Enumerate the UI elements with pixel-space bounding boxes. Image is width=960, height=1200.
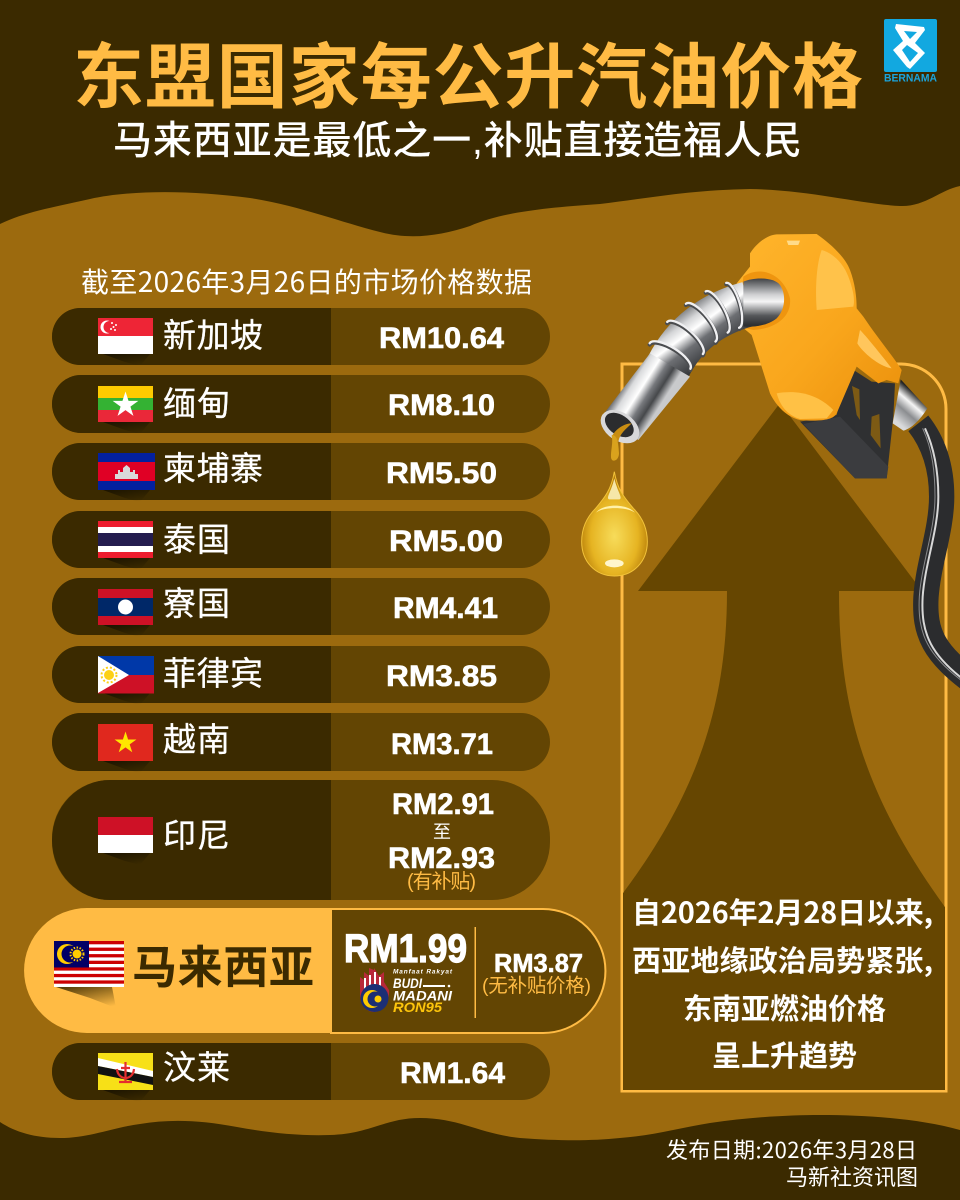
footer: publication date and credit: 发布日期:2026年3月28日 bbox=[666, 1133, 917, 1165]
price: Myanmar: RM8.10 bbox=[388, 389, 495, 422]
flag: Malaysia bbox=[54, 941, 124, 987]
price: Cambodia: RM5.50 bbox=[386, 457, 497, 490]
callout: regional tension text bbox=[632, 890, 933, 1075]
price: Brunei: RM1.64 bbox=[400, 1057, 505, 1090]
footer: publication date and credit bbox=[666, 1133, 918, 1192]
callout: regional tension text: 呈上升趋势 bbox=[712, 1033, 857, 1075]
row: Vietnam bbox=[52, 713, 550, 773]
icon: fuel nozzle with oil drop bbox=[582, 234, 960, 687]
panel: rising price outline box bbox=[622, 364, 946, 1091]
price: Singapore: RM10.64 bbox=[379, 322, 504, 355]
logo: Budi Madani RON95 bbox=[360, 968, 453, 1015]
row: Singapore bbox=[52, 308, 550, 366]
price range: Indonesia: RM2.91 bbox=[392, 788, 494, 821]
price: Malaysia unsubsidised bbox=[482, 948, 591, 997]
label: Myanmar: 缅甸 bbox=[163, 377, 230, 425]
row: Cambodia bbox=[52, 442, 550, 502]
label: Philippines: 菲律宾 bbox=[163, 647, 263, 695]
logo: Budi Madani RON95: Manfaat Rakyat bbox=[393, 968, 453, 976]
price: Thailand: RM5.00 bbox=[389, 525, 503, 558]
logo: Bernama bbox=[884, 19, 937, 84]
label: Thailand: 泰国 bbox=[163, 513, 230, 561]
logo: Budi Madani RON95: BUDI bbox=[393, 975, 423, 991]
price range: Indonesia: 至 bbox=[433, 818, 451, 844]
row: Thailand bbox=[52, 511, 550, 570]
bottom wave footer band bbox=[0, 1115, 960, 1200]
title: 东盟国家每公升汽油价格 bbox=[73, 21, 863, 123]
top wave header band bbox=[0, 0, 960, 236]
flag: Thailand bbox=[98, 521, 153, 558]
price range: Indonesia bbox=[388, 788, 495, 893]
flag: Cambodia bbox=[98, 453, 155, 490]
flag: Myanmar bbox=[98, 386, 153, 422]
row: Indonesia bbox=[52, 780, 550, 900]
row: Malaysia highlight bbox=[24, 908, 605, 1033]
flag: Singapore bbox=[98, 318, 153, 354]
label: Malaysia: 马来西亚 bbox=[132, 931, 314, 996]
data date note: 截至2026年3月26日的市场价格数据 bbox=[81, 261, 532, 301]
footer: publication date and credit: 马新社资讯图 bbox=[786, 1160, 918, 1192]
label: Singapore: 新加坡 bbox=[163, 309, 263, 357]
flag: Laos bbox=[98, 589, 153, 625]
logo: Budi Madani RON95: RON95 bbox=[393, 999, 442, 1015]
row: Brunei bbox=[52, 1041, 550, 1102]
price: Vietnam: RM3.71 bbox=[391, 728, 493, 761]
price: Malaysia unsubsidised: RM3.87 bbox=[494, 948, 583, 978]
callout: regional tension text: 西亚地缘政治局势紧张, bbox=[632, 938, 933, 980]
row: Myanmar bbox=[52, 375, 550, 434]
flag: Indonesia bbox=[98, 817, 153, 853]
flag: Vietnam bbox=[98, 724, 153, 761]
arrow: rising price bbox=[623, 403, 945, 1090]
logo: Budi Madani RON95: MADANI bbox=[393, 988, 453, 1004]
callout: regional tension text: 东南亚燃油价格 bbox=[683, 986, 886, 1028]
label: Indonesia: 印尼 bbox=[163, 809, 230, 857]
flag: Brunei bbox=[98, 1053, 153, 1090]
price: Laos: RM4.41 bbox=[393, 592, 498, 625]
price range: Indonesia: RM2.93 bbox=[388, 842, 495, 875]
price: Malaysia unsubsidised: (无补贴价格) bbox=[482, 975, 591, 997]
label: Laos: 寮国 bbox=[163, 577, 230, 625]
subtitle: 马来西亚是最低之一,补贴直接造福人民 bbox=[113, 120, 802, 163]
label: Brunei: 汶莱 bbox=[163, 1041, 230, 1089]
row: Philippines bbox=[52, 646, 550, 705]
label: Cambodia: 柬埔寨 bbox=[163, 442, 263, 490]
row: Laos bbox=[52, 577, 550, 637]
price: Philippines: RM3.85 bbox=[386, 660, 497, 693]
logo: Bernama: BERNAMA bbox=[884, 72, 937, 84]
price range: Indonesia: (有补贴) bbox=[407, 870, 476, 893]
label: Vietnam: 越南 bbox=[163, 713, 230, 761]
price: Malaysia subsidised: RM1.99 bbox=[344, 927, 467, 971]
flag: Philippines bbox=[98, 656, 154, 694]
callout: regional tension text: 自2026年2月28日以来, bbox=[632, 890, 933, 932]
